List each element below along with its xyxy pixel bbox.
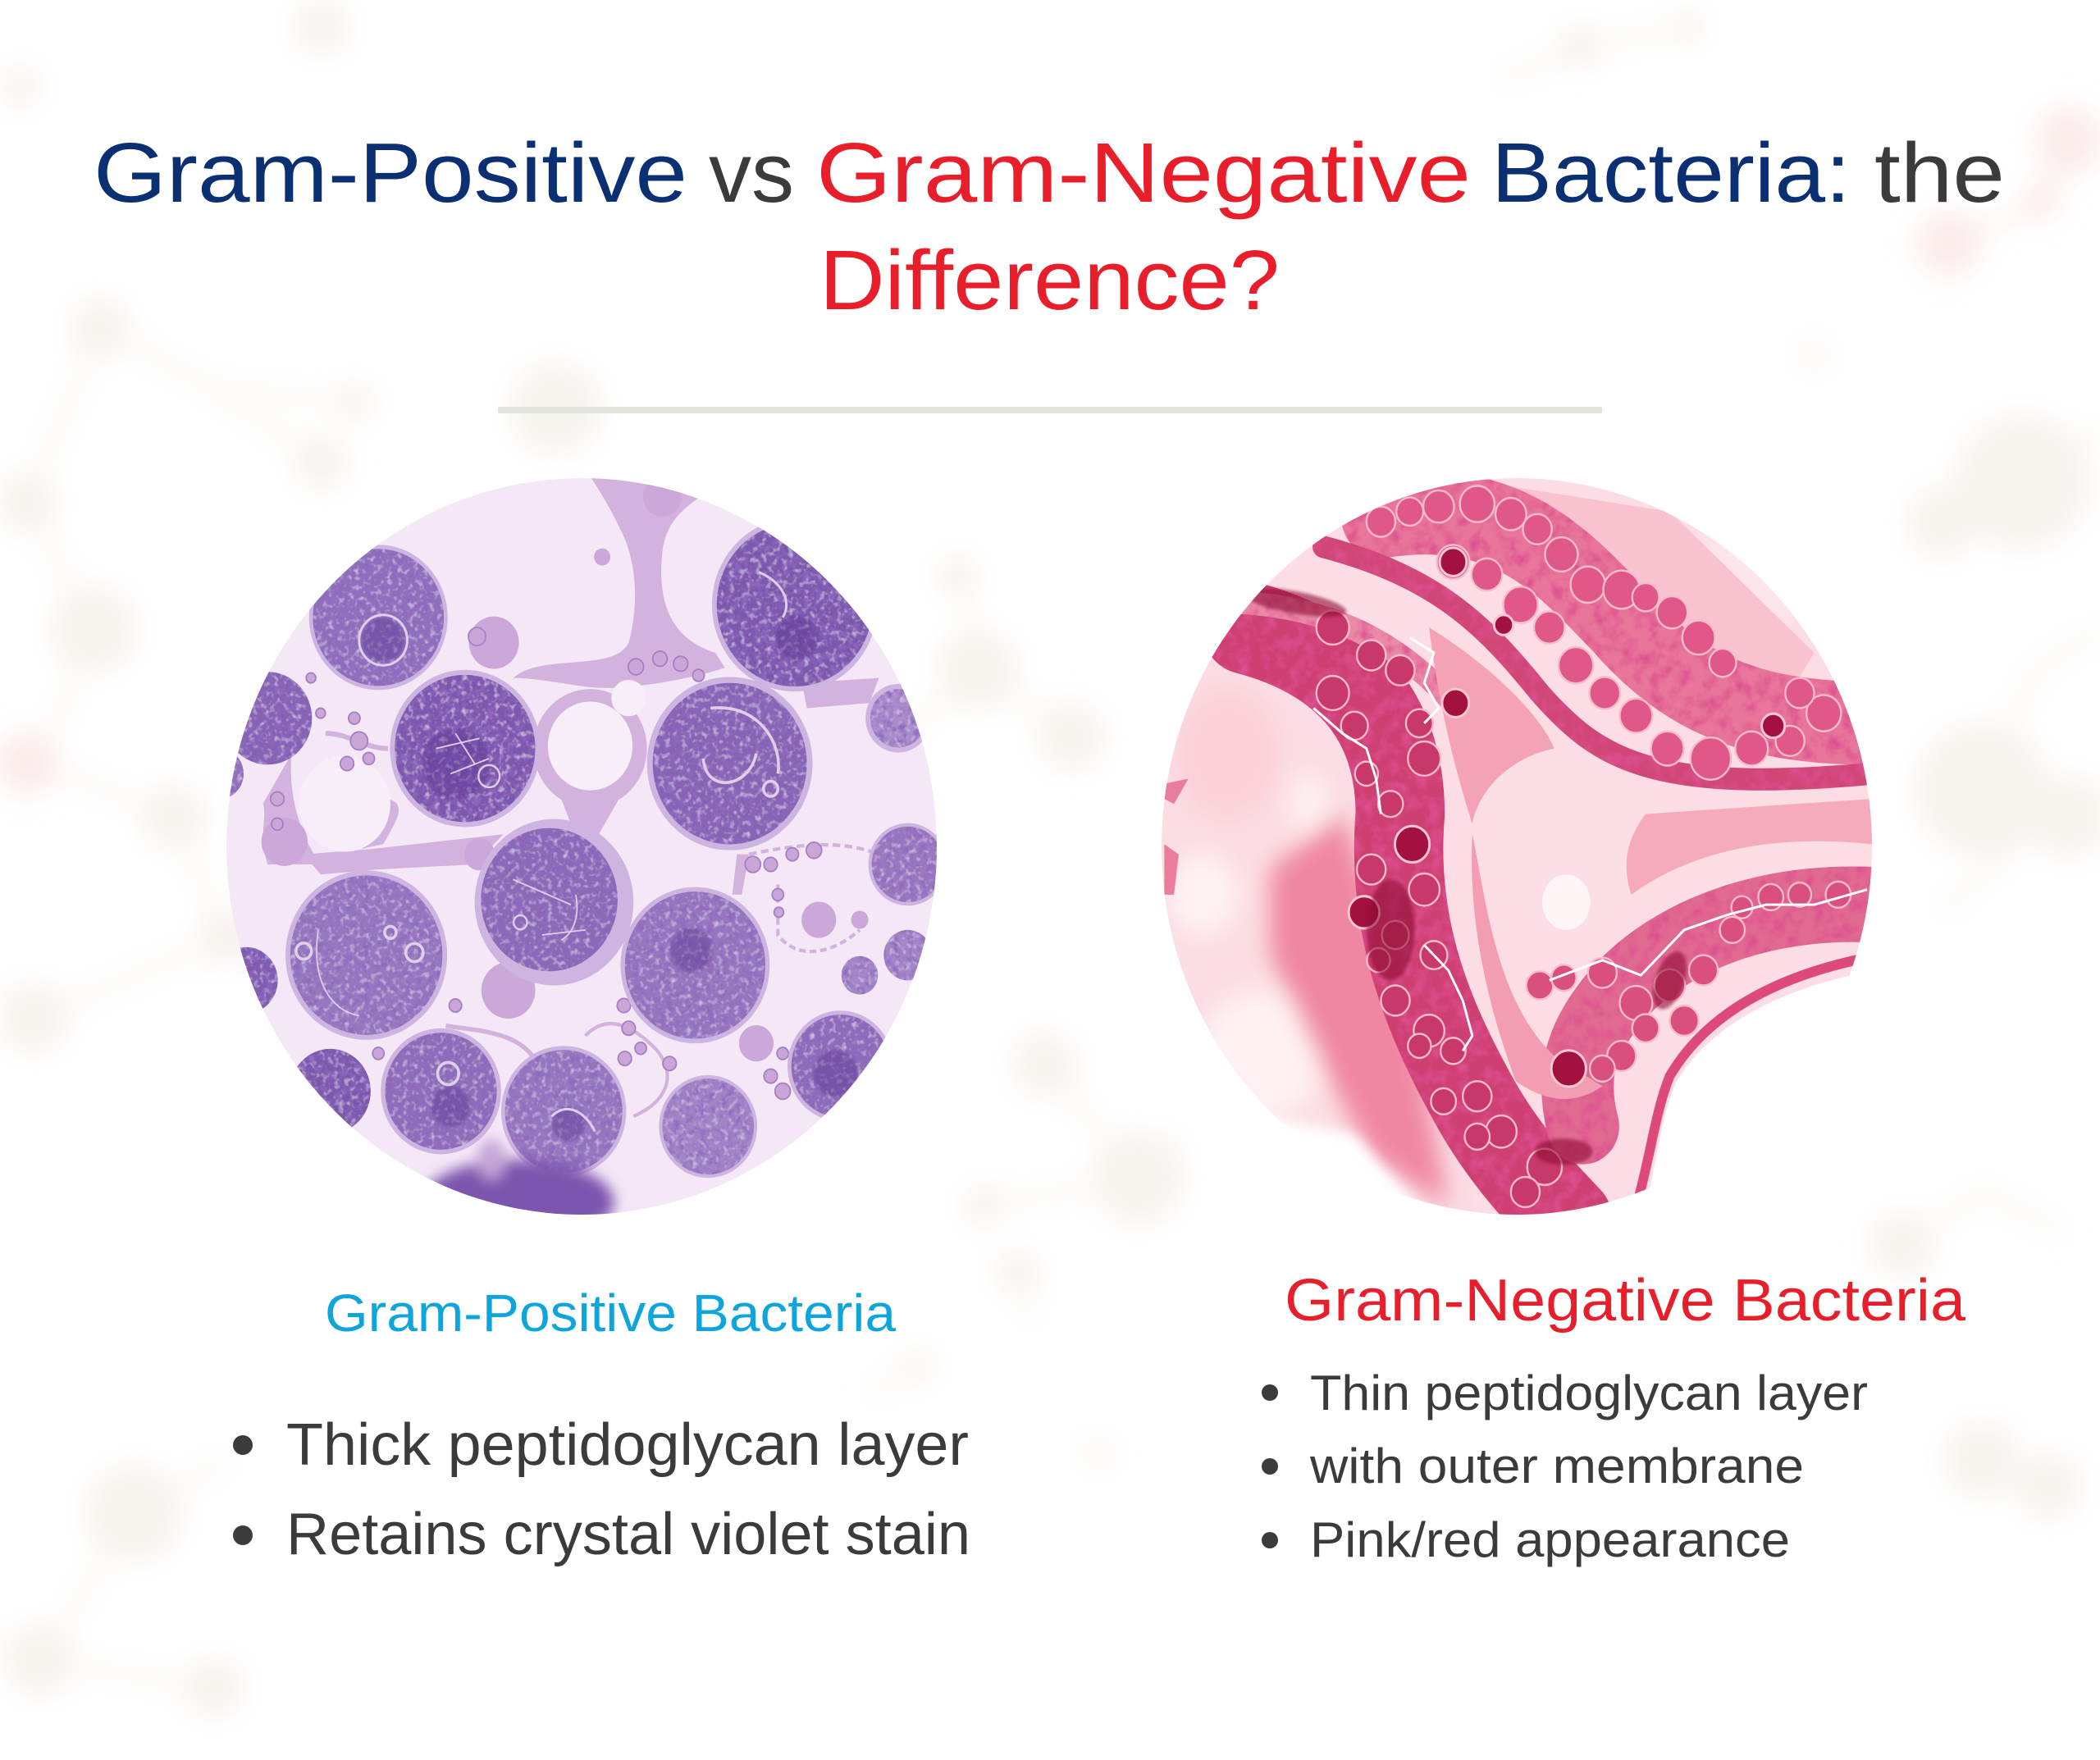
lower right outer lining (1636, 958, 1867, 1207)
small left tissue fragment (1164, 778, 1189, 895)
title word: Gram-Positive: Gram-Positive (94, 125, 687, 220)
title word: vs: vs (709, 125, 794, 220)
clear vacuoles (340, 680, 641, 852)
bead chains (271, 627, 822, 1099)
bullet list: gram-negative: Pink/red appearance (1310, 1512, 1790, 1567)
divider rule (498, 407, 1602, 413)
bullet list: gram-positive (233, 1412, 970, 1567)
blurred tissue tones (1169, 536, 1824, 1207)
tissue bands (1236, 513, 1872, 1222)
bullet list: gram-negative: Thin peptidoglycan layer (1310, 1366, 1868, 1420)
micrograph: gram-positive purple cells (195, 476, 947, 1245)
pale centre (1489, 750, 1872, 935)
title word: the: the (1874, 125, 2005, 220)
title (94, 125, 2005, 327)
title word: Gram-Negative: Gram-Negative (816, 125, 1471, 220)
bullet list: gram-negative: with outer membrane (1309, 1439, 1804, 1493)
lilac blobs (262, 476, 869, 1061)
subheading: gram-negative: Gram-Negative Bacteria (1285, 1268, 1966, 1334)
white lower right corner (1641, 970, 1882, 1227)
outer halos (285, 518, 947, 1178)
nuclei and inclusions (362, 615, 858, 1141)
membrane strands (262, 476, 879, 895)
title word: Bacteria:: Bacteria: (1491, 125, 1851, 220)
dark red cells (1349, 548, 1785, 1087)
bullet list: gram-negative (1262, 1366, 1868, 1567)
textured cell bodies (195, 523, 944, 1174)
pale top-right tissue (1477, 481, 1815, 733)
title word: Difference?: Difference? (819, 233, 1280, 327)
micrograph: gram-negative pink tissue (1159, 478, 1882, 1227)
white lower left fade (1159, 1106, 1439, 1227)
subheading: gram-positive: Gram-Positive Bacteria (325, 1284, 896, 1343)
dark blurred foreground cell (424, 1133, 623, 1215)
epithelial cell outlines (1317, 486, 1851, 1207)
wavy membranes (1313, 637, 1867, 1051)
bullet list: gram-positive: Thick peptidoglycan layer (286, 1412, 969, 1478)
wedge between the bands (1429, 627, 1554, 824)
bullet list: gram-positive: Retains crystal violet stain (286, 1502, 970, 1567)
